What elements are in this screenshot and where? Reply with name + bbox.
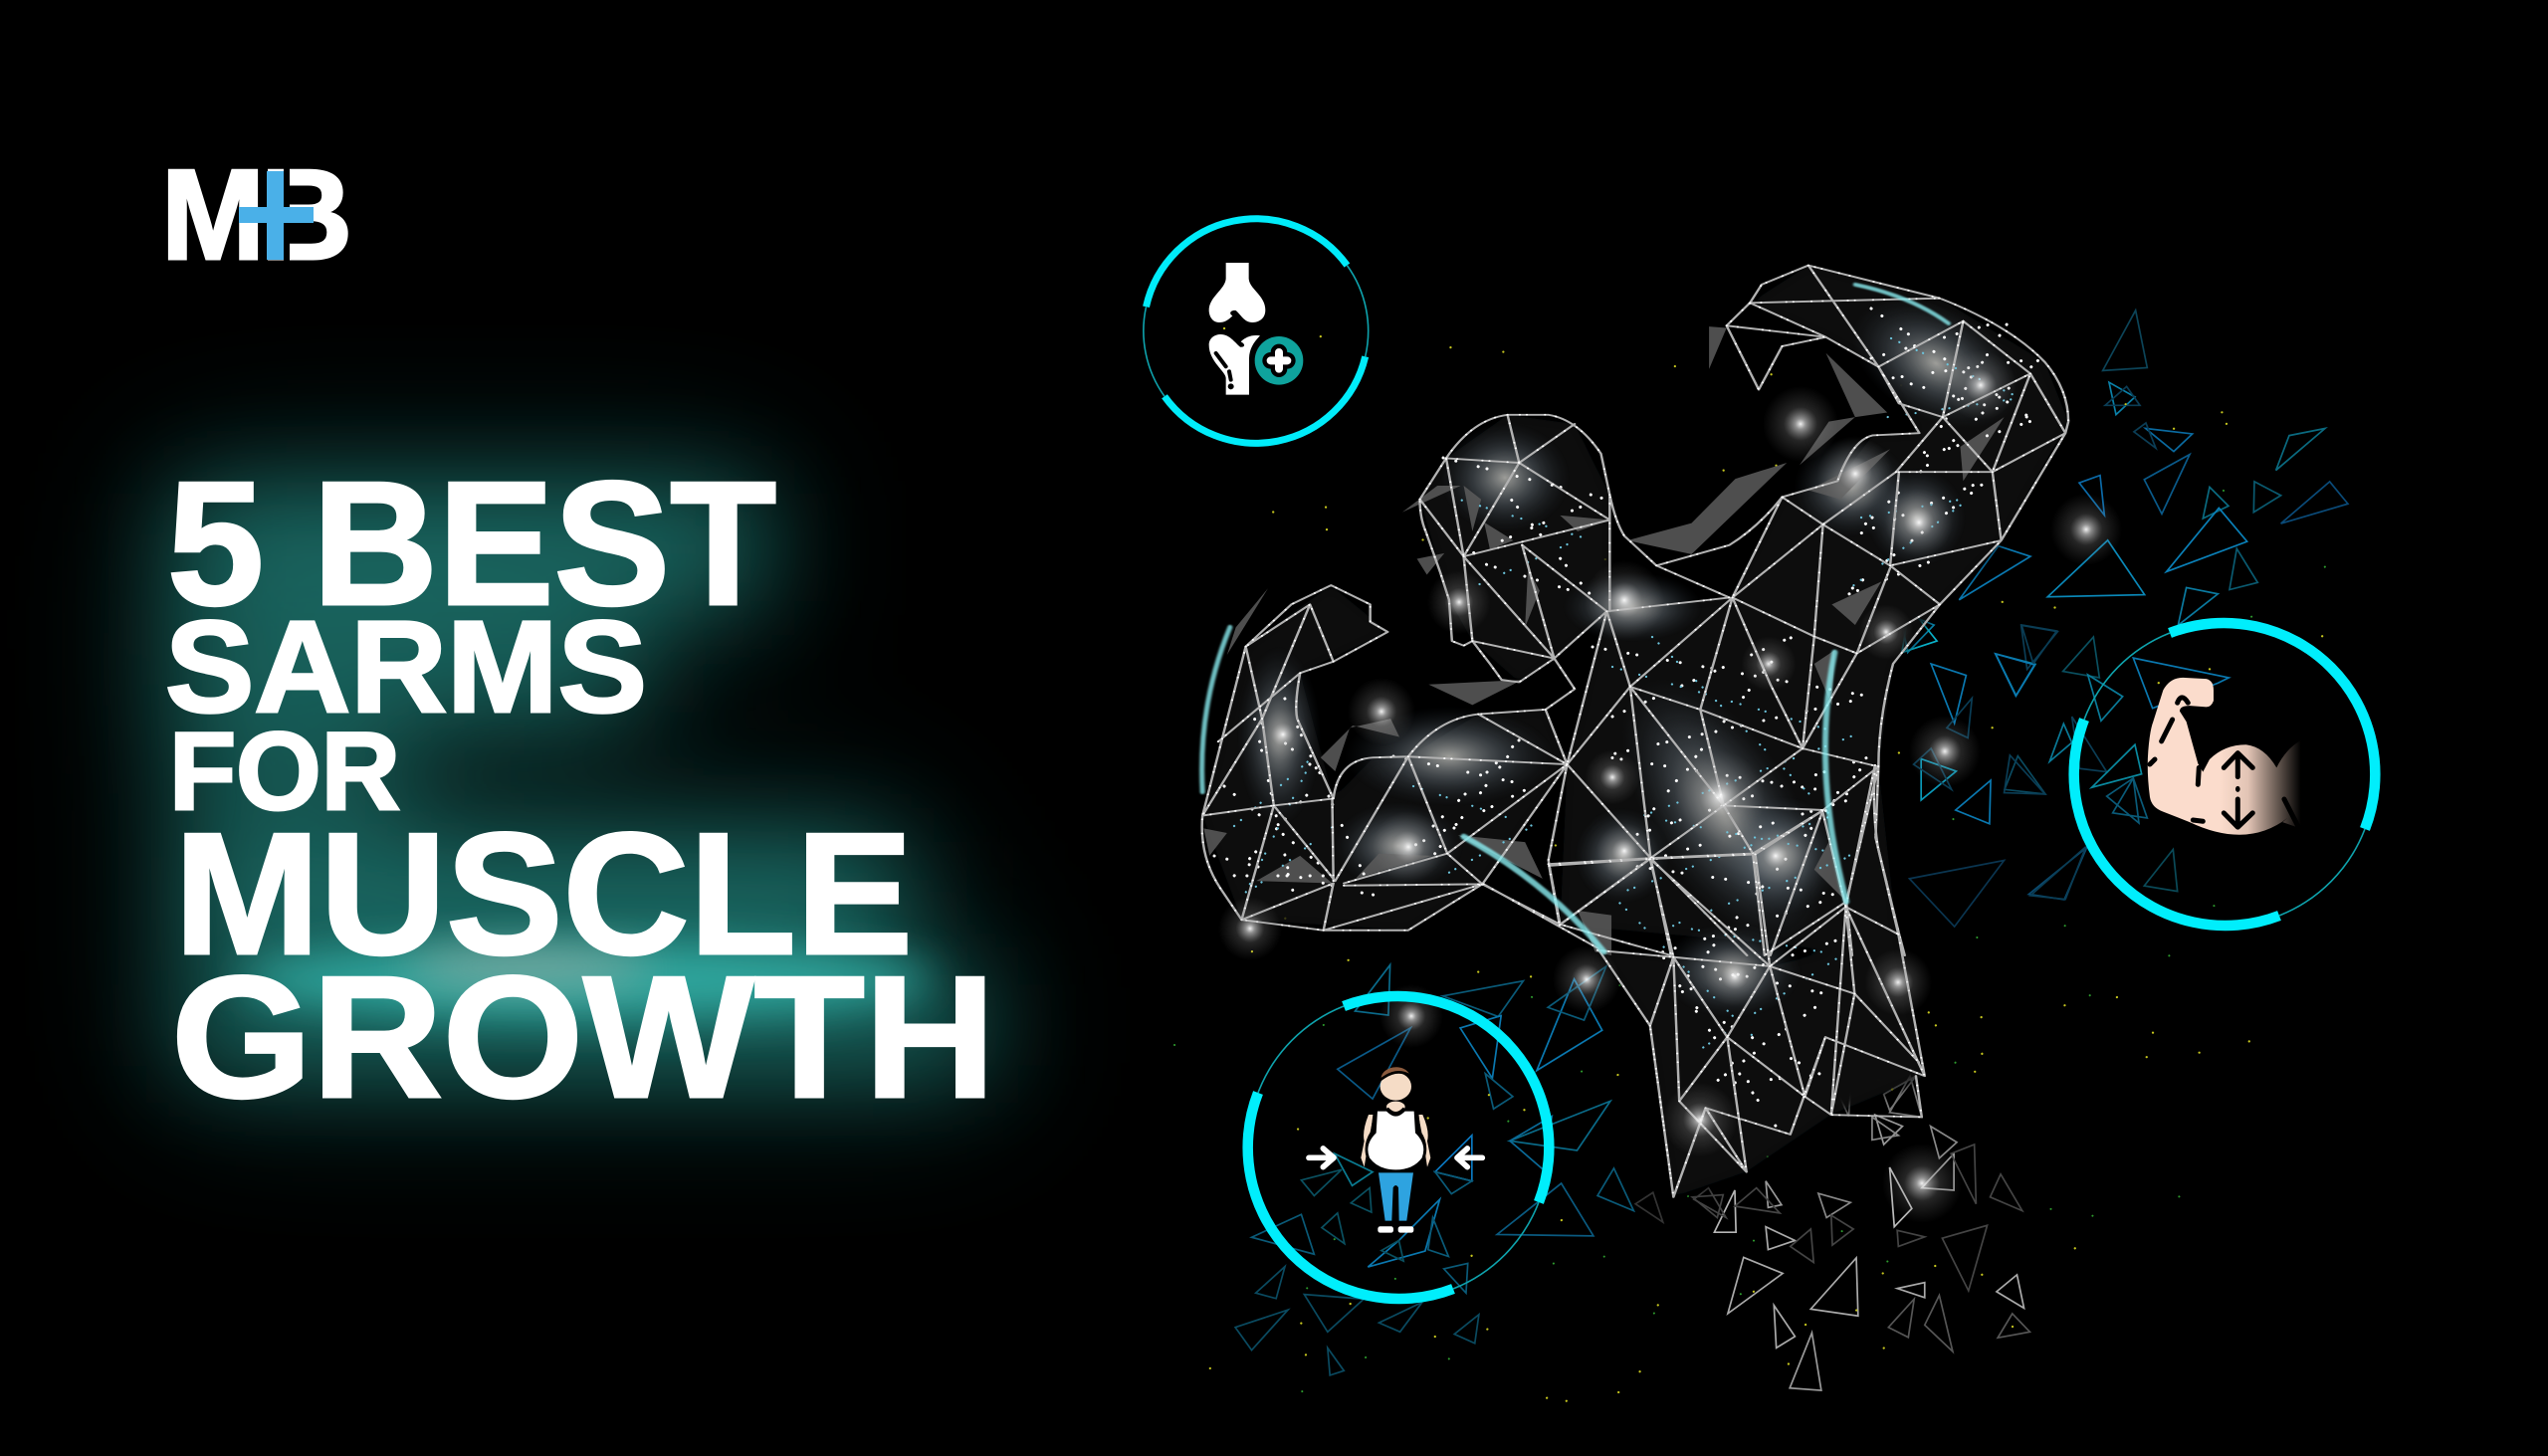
teal glow behind title — [169, 493, 985, 1070]
blue triangle fragments near right flank — [1880, 533, 2086, 927]
title: SARMS — [165, 593, 647, 739]
logo: M+B: B — [261, 143, 352, 287]
title: 5 BEST — [167, 445, 776, 642]
grey translucent shards on the figure — [1203, 326, 2005, 955]
dark haze silhouette of the figure — [1202, 266, 2068, 1197]
ring icon: bone joint — [1144, 219, 1369, 443]
title: MUSCLE — [174, 796, 913, 990]
title — [165, 445, 995, 1134]
title: FOR — [169, 711, 400, 833]
polygon wireframe muscular figure — [1202, 266, 2068, 1197]
glowing light spots — [1218, 349, 2122, 1223]
cyan light streaks on the figure — [1202, 285, 1949, 951]
distant yellow and green stars — [1174, 299, 2339, 1413]
ring icon: overweight person — [1248, 996, 1549, 1299]
icon: person with inward arrows — [1309, 1067, 1482, 1233]
title: GROWTH — [171, 939, 995, 1134]
teal triangle fragments around lower-left ring — [1235, 965, 1663, 1375]
logo: M+B: M — [161, 143, 265, 287]
stars inside the figure — [1214, 309, 2040, 1135]
grey triangle fragments below the figure — [1692, 1074, 2029, 1390]
blue triangle fragments right of the figure — [1996, 311, 2348, 900]
icon: biceps with arrows — [2148, 678, 2301, 835]
ring icon: flexed muscle — [2074, 623, 2375, 926]
nebula haze inside the figure — [1237, 272, 2041, 1018]
icon: knee bones with plus — [1209, 263, 1303, 395]
logo: M+B — [161, 143, 352, 287]
